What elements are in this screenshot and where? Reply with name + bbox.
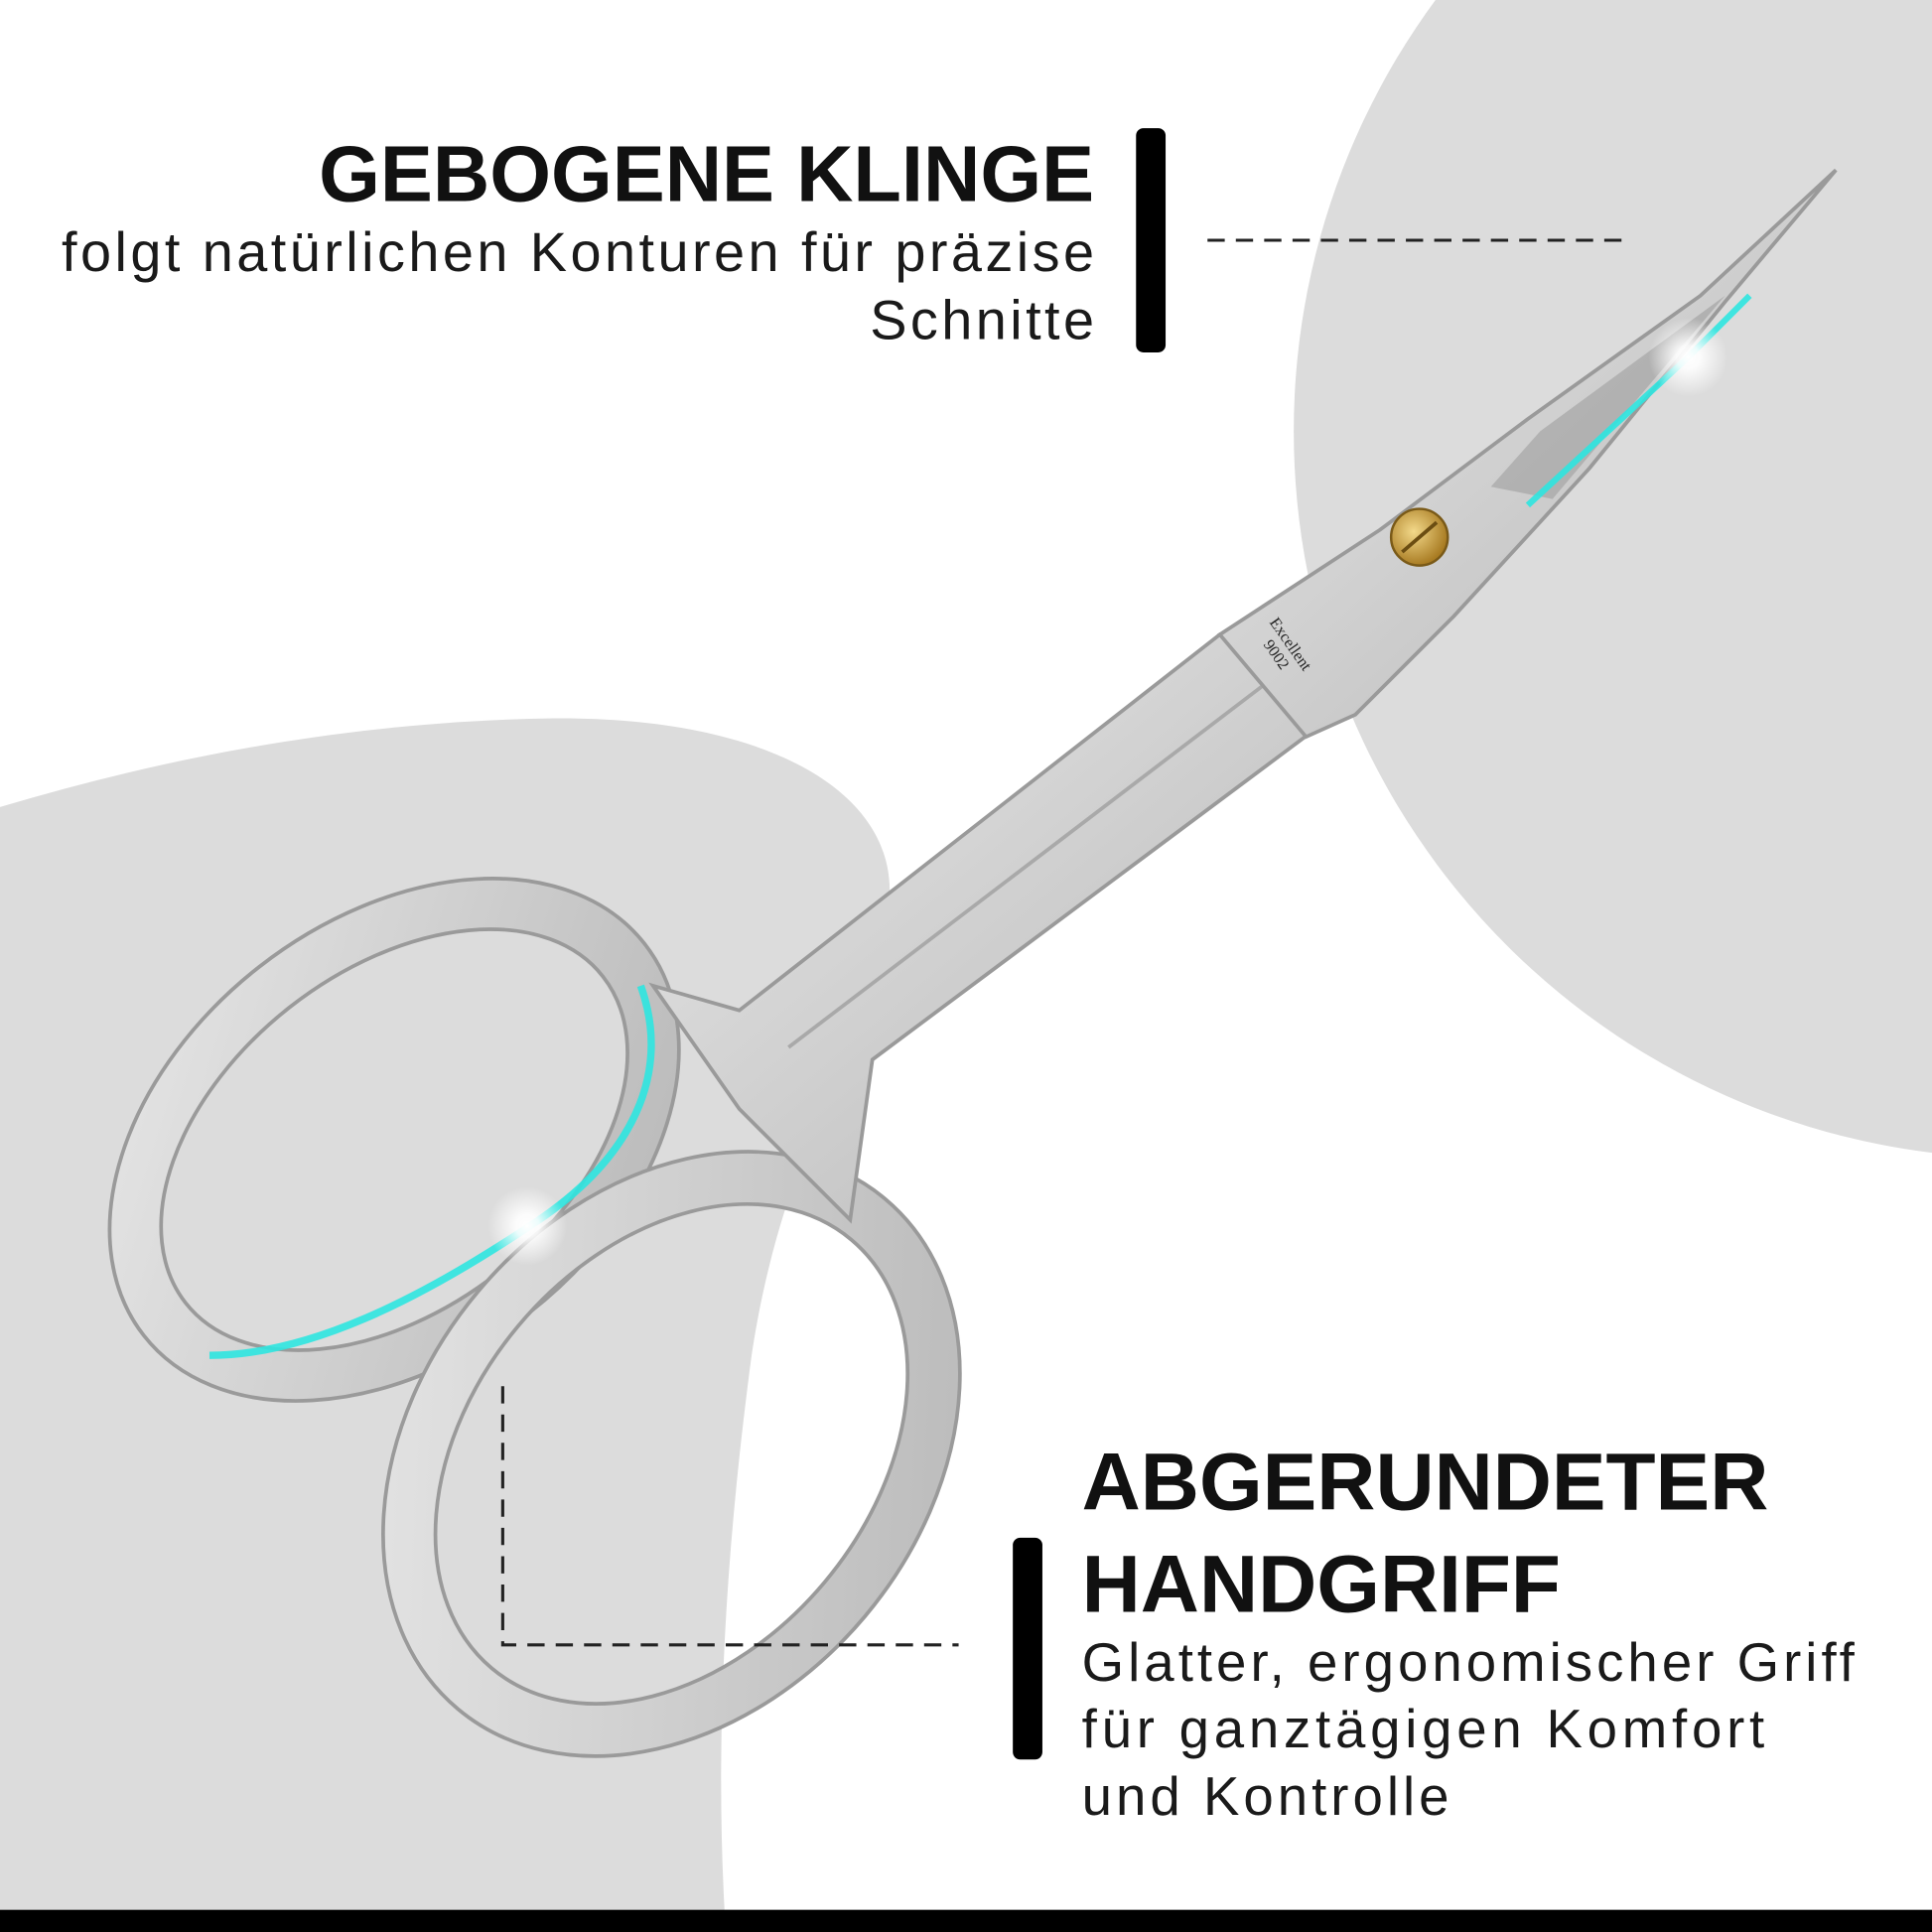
upper finger ring (9, 771, 780, 1508)
heading: Abgerundeter Handgriff: ABGERUNDETER (1082, 1437, 1768, 1527)
heading: Abgerundeter Handgriff: und Kontrolle (1082, 1766, 1449, 1827)
cyan highlight blade (1528, 296, 1749, 505)
heading: Abgerundeter Handgriff: Glatter, ergonomischer Griff (1082, 1632, 1856, 1693)
shanks (653, 634, 1343, 1220)
dashed line top (1207, 239, 1632, 241)
heading: Gebogene Klinge (62, 129, 1094, 350)
background blob bottom left (0, 719, 890, 1910)
lower finger ring (264, 1036, 1079, 1871)
heading: Abgerundeter Handgriff: HANDGRIFF (1082, 1539, 1561, 1629)
screw (1391, 509, 1448, 566)
heading: Abgerundeter Handgriff: für ganztägigen Komfort (1082, 1699, 1764, 1759)
dashed line bottom (502, 1386, 959, 1645)
heading: Gebogene Klinge: Schnitte (870, 288, 1094, 350)
cyan highlight ring (209, 986, 651, 1355)
heading: Abgerundeter Handgriff (1082, 1437, 1856, 1827)
bar bottom (1013, 1538, 1042, 1759)
background circle top right (1294, 0, 1932, 1159)
scissors: 9002 (1260, 637, 1292, 673)
bottom black bar (0, 1910, 1932, 1932)
heading: Gebogene Klinge: GEBOGENE KLINGE (319, 129, 1094, 217)
engraving: Excellent (1266, 615, 1314, 674)
bar top (1136, 128, 1166, 352)
heading: Gebogene Klinge: folgt natürlichen Konturen für präzise (62, 220, 1094, 283)
blades (1220, 170, 1836, 737)
